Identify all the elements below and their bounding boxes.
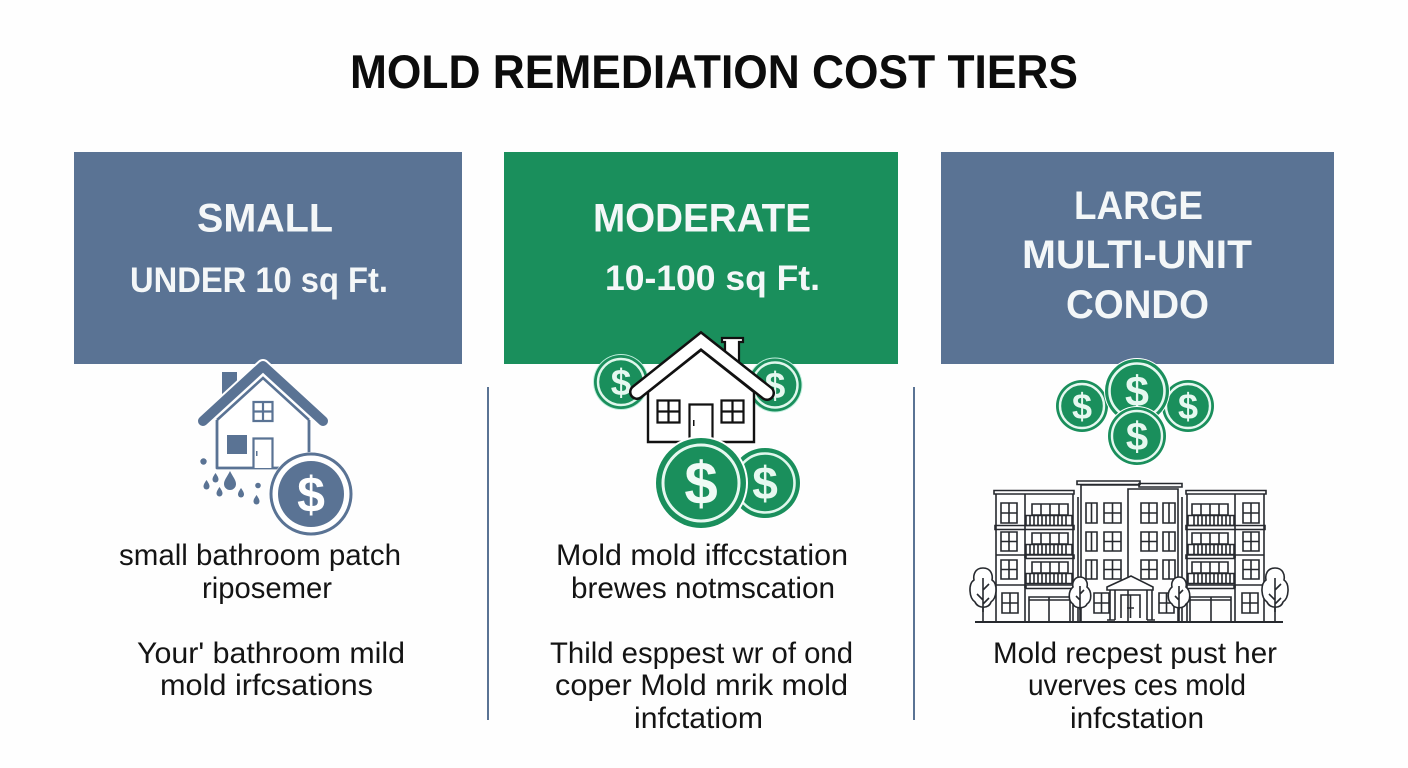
right wing	[1182, 490, 1266, 622]
divider right	[913, 387, 915, 720]
icon: moderate house with coins	[593, 338, 802, 530]
coin back right	[729, 447, 801, 519]
text block: large description: uverves ces mold	[1028, 669, 1246, 702]
heading: large multi-unit condo: CONDO	[1066, 283, 1209, 327]
chimney	[722, 338, 743, 372]
coin right: $	[765, 365, 786, 406]
panel: moderate tier header	[504, 152, 898, 364]
divider left	[487, 387, 489, 720]
roof	[203, 366, 323, 421]
icon: condo building	[970, 481, 1288, 622]
chimney	[222, 372, 237, 394]
text: moderate size range: 10-100 sq Ft.	[605, 259, 820, 298]
icon: small house with water drops and coin	[200, 366, 353, 536]
window right	[722, 400, 744, 422]
text block: moderate description: brewes notmscation	[571, 572, 835, 605]
coin left: $	[1072, 386, 1092, 427]
windows	[658, 400, 680, 422]
text block: small description: small bathroom patch	[119, 539, 401, 572]
text block: small description: Your' bathroom mild	[137, 637, 405, 670]
coin left: $	[611, 362, 632, 403]
coin top	[1104, 358, 1170, 424]
coin front big	[654, 436, 748, 530]
heading: large multi-unit condo: MULTI-UNIT	[1022, 233, 1252, 277]
coin	[269, 452, 353, 536]
coin top: $	[1125, 368, 1149, 416]
text block: large description: infcstation	[1070, 702, 1204, 735]
text block: moderate description: Mold mold iffccstation	[556, 539, 848, 572]
center block	[1077, 481, 1182, 622]
text block: moderate description: infctatiom	[634, 702, 763, 735]
heading: large multi-unit condo	[1022, 184, 1252, 327]
text block: moderate description	[550, 539, 853, 735]
coin bottom	[1107, 406, 1167, 466]
left wing	[994, 490, 1078, 622]
coin: $	[297, 467, 325, 523]
text block: large description: Mold recpest pust her	[993, 637, 1277, 670]
text: small size range: UNDER 10 sq Ft.	[130, 261, 388, 300]
house walls	[217, 420, 309, 468]
house walls	[648, 350, 754, 442]
door	[690, 404, 712, 438]
coin back right: $	[752, 457, 778, 509]
coin left	[1056, 380, 1108, 432]
panel: small tier header	[74, 152, 462, 364]
icon: four coins	[1056, 358, 1214, 466]
title: MOLD REMEDIATION COST TIERS	[350, 45, 1078, 98]
door	[254, 438, 272, 468]
heading: large multi-unit condo: LARGE	[1074, 184, 1203, 228]
coin right	[748, 358, 802, 412]
text block: small description: riposemer	[202, 572, 332, 605]
heading: small: SMALL	[197, 196, 333, 240]
trees	[970, 568, 1288, 622]
heading: moderate: MODERATE	[593, 196, 811, 240]
text block: moderate description: coper Mold mrik mold	[555, 669, 848, 702]
text block: large description	[993, 637, 1277, 735]
entrance portico	[1107, 576, 1155, 620]
coin left	[593, 354, 649, 410]
roof	[637, 341, 767, 393]
text block: small description: mold irfcsations	[160, 669, 373, 702]
window	[254, 402, 272, 421]
text block: moderate description: Thild esppest wr of ond	[550, 637, 853, 670]
coin right	[1162, 380, 1214, 432]
ground line	[975, 621, 1283, 623]
coin bottom: $	[1126, 415, 1148, 459]
coin right: $	[1178, 386, 1198, 427]
text block: small description	[119, 539, 405, 702]
coin front big: $	[684, 450, 718, 517]
water drops	[200, 458, 261, 504]
panel: large tier header	[941, 152, 1334, 364]
